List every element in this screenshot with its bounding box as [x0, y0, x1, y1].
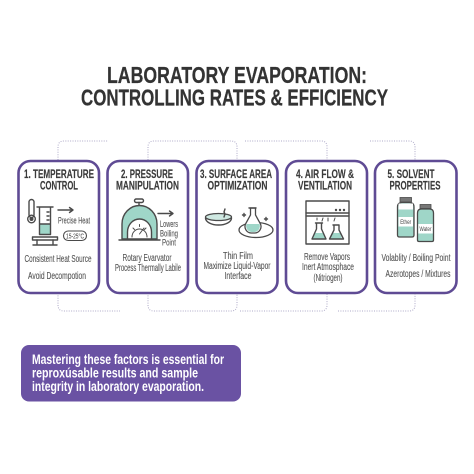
callout: conclusion banner: Mastering these factors is essential for [32, 351, 224, 367]
heading: pressure manipulation: 2. PRESSURE [121, 167, 173, 181]
text: rotary evaporator notes: Rotary Evarvator [122, 253, 172, 264]
icon: ether and water bottles: Ether [400, 219, 412, 226]
text: remove vapors notes [302, 252, 354, 284]
heading: solvent properties: PROPERTIES [390, 178, 440, 192]
text: thin film notes [204, 251, 271, 282]
badge: temperature range: 15-25°C [66, 232, 84, 240]
heading: air flow and ventilation [296, 167, 354, 192]
heading: pressure manipulation: MANIPULATION [116, 178, 179, 192]
panel: solvent properties [375, 161, 456, 293]
heading: temperature control [24, 167, 94, 192]
label: lowers boiling point: Point [162, 238, 176, 248]
panel: temperature control [18, 161, 99, 293]
icon: dish and flask [206, 208, 273, 238]
heading: solvent properties [388, 167, 440, 192]
icon: bell jar with gauge [119, 199, 173, 240]
icon: ether and water bottles: Water [420, 226, 432, 233]
panel: air flow and ventilation [286, 161, 367, 293]
heading: surface area optimization: OPTIMIZATION [208, 178, 268, 192]
icon: ether and water bottles [398, 198, 434, 242]
heading: temperature control: CONTROL [40, 178, 78, 192]
heading: temperature control: 1. TEMPERATURE [24, 167, 94, 181]
panel: surface area optimization [196, 161, 278, 293]
title [81, 62, 388, 110]
heading: surface area optimization: 3. SURFACE AREA [200, 167, 272, 181]
text: remove vapors notes: Remove Vapors [304, 252, 350, 263]
text: thin film notes: Thin Film [223, 251, 253, 262]
text: rotary evaporator notes: Process Thermally Labile [115, 263, 181, 274]
text: remove vapors notes: (Nitriogen) [314, 273, 342, 284]
text: heat source notes: Consistent Heat Source [24, 254, 92, 265]
panel: pressure manipulation [108, 161, 188, 293]
callout: conclusion banner: reproxúsable results and sample [32, 364, 198, 380]
text: rotary evaporator notes [115, 253, 181, 274]
callout: conclusion banner [21, 345, 241, 402]
label: lowers boiling point: Boiling [160, 228, 178, 238]
label: precise heat: Precise Heat [58, 216, 90, 226]
text: volatility notes [382, 253, 451, 280]
heading: air flow and ventilation: 4. AIR FLOW & [296, 167, 354, 181]
text: thin film notes: Interface [224, 271, 252, 282]
arrow: lowers pressure [158, 211, 173, 216]
icon: thermometer and beaker on hotplate [28, 200, 73, 245]
heading: surface area optimization [200, 167, 272, 192]
arrow: heat [58, 208, 73, 212]
text: heat source notes: Avoid Decompotion [28, 271, 86, 282]
text: remove vapors notes: Inert Atmosphace [302, 262, 354, 273]
label: lowers boiling point [160, 219, 178, 248]
callout: conclusion banner: integrity in laboratory evaporation. [32, 378, 204, 394]
icon: fume hood with flasks [306, 201, 349, 244]
text: heat source notes [24, 254, 92, 282]
heading: solvent properties: 5. SOLVENT [388, 167, 435, 181]
label: lowers boiling point: Lowers [160, 219, 178, 229]
heading: pressure manipulation [116, 167, 179, 192]
text: thin film notes: Maximize Liquid-Vapor [204, 261, 271, 272]
heading: air flow and ventilation: VENTILATION [298, 178, 352, 192]
title: LABORATORY EVAPORATION: [107, 62, 367, 88]
